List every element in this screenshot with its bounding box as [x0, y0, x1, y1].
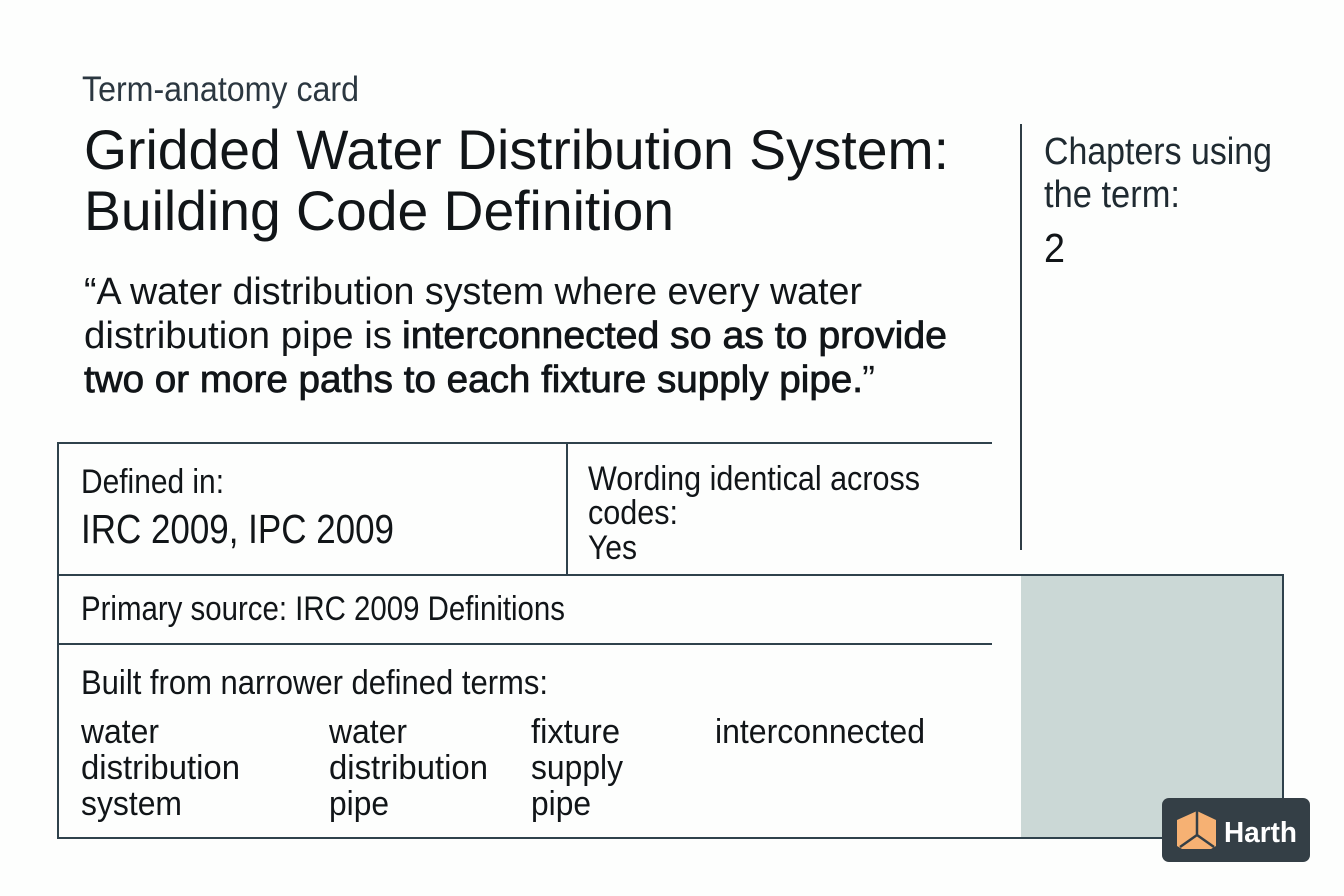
- cell: primary source: Primary source: IRC 2009 Definitions: [81, 590, 565, 628]
- term: water distribution system: distribution: [81, 749, 240, 787]
- definition quote: distribution pipe is: [84, 315, 392, 357]
- term: water distribution pipe: pipe: [329, 785, 389, 823]
- term: water distribution system: [80, 713, 240, 823]
- cell: defined in: Defined in:: [81, 463, 224, 501]
- definition quote: [84, 271, 947, 401]
- cell: wording identical: Wording identical across: [588, 460, 920, 498]
- definition quote: “A water distribution system where every water: [84, 271, 862, 313]
- cell: defined in: IRC 2009, IPC 2009: [81, 506, 394, 552]
- cell: wording identical: codes:: [588, 494, 678, 532]
- cell: wording identical: Yes: [588, 529, 637, 567]
- definition quote: two or more paths to each fixture supply pipe.: [84, 359, 863, 401]
- icon: cube: [1177, 811, 1216, 849]
- eyebrow label: Term-anatomy card: [82, 70, 359, 109]
- sidebar divider: [1020, 124, 1022, 550]
- title: Gridded Water Distribution System:: [84, 118, 949, 181]
- term: fixture supply pipe: fixture: [531, 713, 620, 751]
- definition quote: interconnected so as to provide: [402, 315, 947, 357]
- cell: wording identical: [588, 460, 920, 567]
- term: water distribution pipe: water: [328, 713, 407, 751]
- sidebar: chapters using the term: [1044, 131, 1272, 271]
- shaded panel: [1021, 575, 1283, 838]
- logo wordmark: Harth: [1224, 817, 1297, 849]
- title: Building Code Definition: [84, 179, 674, 242]
- logo badge: [1162, 798, 1310, 862]
- table frame: [58, 443, 1283, 838]
- term: water distribution system: water: [80, 713, 159, 751]
- term: fixture supply pipe: supply: [531, 749, 623, 787]
- term: fixture supply pipe: [531, 713, 623, 823]
- sidebar: chapters using the term: the term:: [1044, 174, 1180, 216]
- cell: narrower terms heading: Built from narrower defined terms:: [81, 664, 548, 702]
- sidebar: chapters using the term: Chapters using: [1044, 131, 1272, 173]
- title: [84, 118, 949, 242]
- term: water distribution system: system: [81, 785, 182, 823]
- term: water distribution pipe: distribution: [329, 749, 488, 787]
- sidebar: chapters using the term: 2: [1044, 225, 1065, 271]
- definition quote: ”: [862, 359, 875, 401]
- cell: defined in: [81, 463, 394, 552]
- term: fixture supply pipe: pipe: [531, 785, 591, 823]
- term: water distribution pipe: [328, 713, 488, 823]
- term: interconnected: interconnected: [715, 713, 925, 751]
